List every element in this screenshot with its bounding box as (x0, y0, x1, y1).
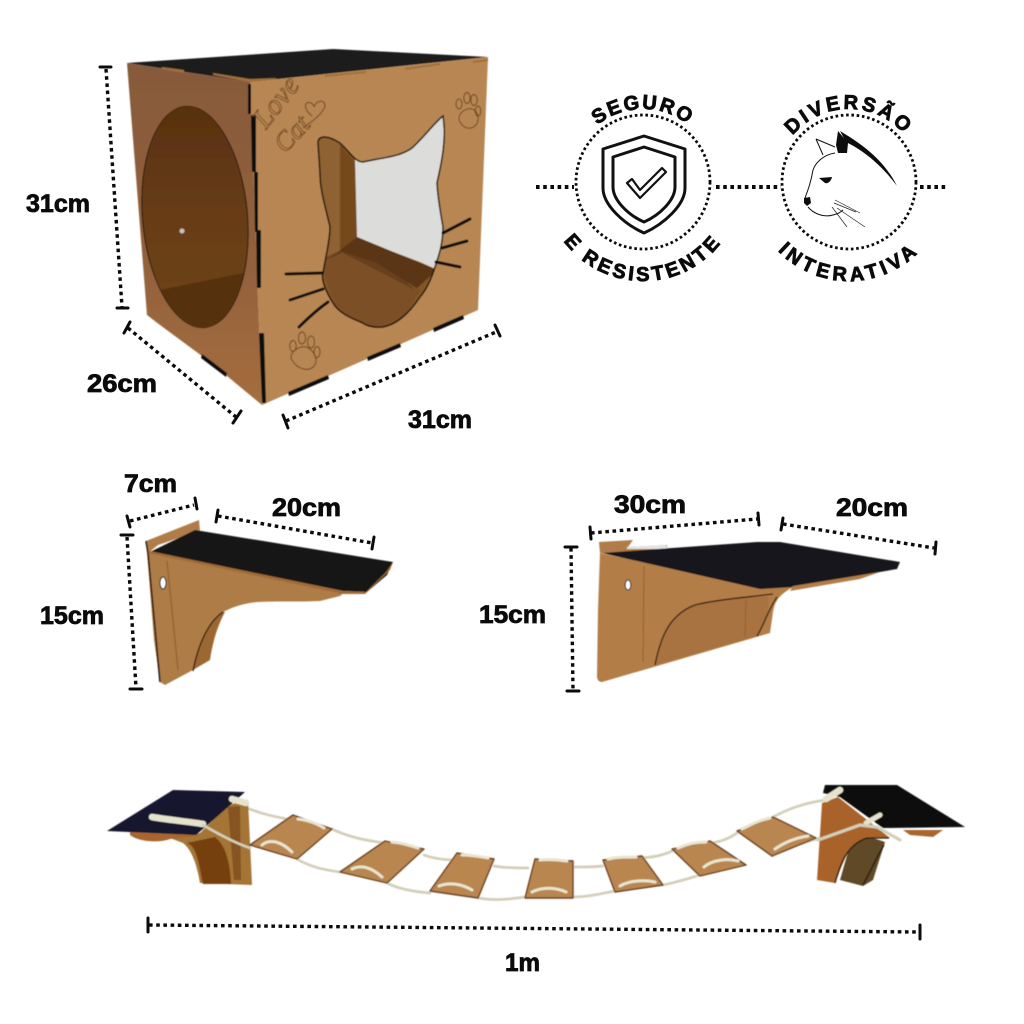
label: 26cm depth: 26cm (87, 370, 157, 398)
label: 20cm: 20cm (272, 494, 341, 522)
badge subtitle: INTERATIVA (778, 241, 918, 282)
badge: diversao interativa (778, 94, 918, 282)
icon: shield (603, 136, 685, 233)
dimension: small shelf 20cm (216, 510, 374, 549)
shelf bracket (147, 552, 345, 685)
dimension: cube width (283, 325, 500, 428)
icon: cat (804, 131, 897, 227)
engraving: Love Cat (246, 70, 325, 158)
product: wide shelf (597, 540, 900, 682)
badge: seguro e resistente (564, 94, 721, 282)
wide shelf bracket (597, 553, 795, 682)
product: rope bridge (107, 785, 965, 900)
dimension: small shelf 7cm (127, 498, 197, 527)
left platform (107, 790, 252, 885)
label: 15cm: 15cm (40, 602, 104, 630)
label: 20cm: 20cm (836, 494, 908, 522)
label: 30cm: 30cm (614, 491, 686, 519)
cube front face (250, 57, 488, 405)
whiskers (286, 219, 470, 327)
badge title: DIVERSÃO (783, 94, 910, 135)
badge title: SEGURO (592, 94, 692, 124)
dimension: wide shelf 15cm (565, 547, 579, 691)
dimension: wide shelf 30cm (590, 513, 759, 539)
keyhole (160, 577, 166, 589)
rear tab (599, 540, 667, 553)
label: 31cm width: 31cm (408, 406, 472, 434)
badge ring (782, 115, 916, 249)
left face round opening (140, 105, 250, 329)
rope loops on planks (262, 818, 808, 892)
label: 7cm: 7cm (124, 470, 177, 498)
keyhole (625, 580, 631, 590)
ropes (205, 800, 825, 900)
shelf edge (148, 551, 393, 594)
joint slots and tabs (162, 59, 488, 403)
product: small shelf (146, 520, 393, 685)
badge subtitle: E RESISTENTE (564, 232, 721, 282)
engraving: Love Cat: Cat (267, 108, 317, 158)
connector dotted line (536, 185, 947, 189)
label: 31cm height: 31cm (26, 190, 90, 218)
planks (250, 815, 816, 898)
cube left face (127, 63, 262, 405)
label: 15cm: 15cm (479, 601, 546, 629)
engraving: paw top right (456, 92, 481, 128)
shelf felt top (150, 530, 393, 592)
inner recess (655, 596, 768, 665)
dimension: bridge length (148, 918, 920, 939)
dimension: small shelf 15cm (121, 535, 142, 689)
engraving: paw bottom left (290, 332, 320, 369)
wide shelf felt top (602, 542, 900, 589)
badge ring (576, 115, 710, 249)
label: 1m: 1m (505, 949, 540, 977)
product: cube cat house (127, 49, 495, 410)
dimension: cube height (100, 67, 128, 308)
dimension: wide shelf 20cm (781, 518, 936, 554)
right platform (817, 785, 965, 886)
engraving: Love Cat: Love (246, 70, 306, 135)
cat shaped opening (316, 114, 446, 328)
dimension: cube depth (124, 322, 241, 423)
cube top felt (127, 49, 488, 82)
rear leg (193, 612, 225, 670)
